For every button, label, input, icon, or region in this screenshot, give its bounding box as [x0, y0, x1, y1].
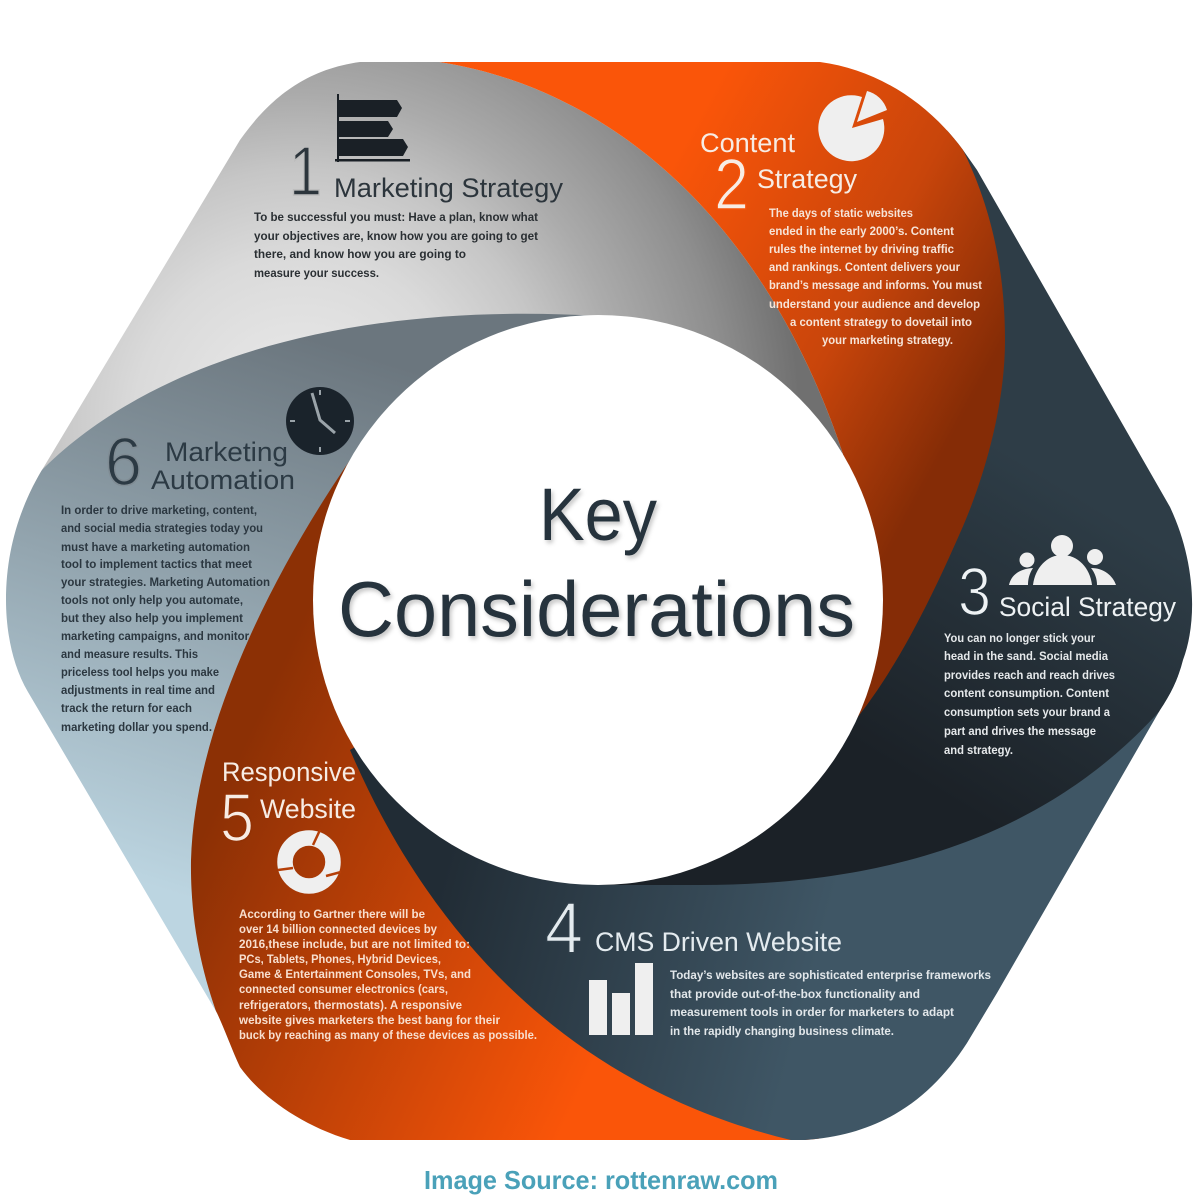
body text: priceless tool helps you make: [61, 667, 219, 679]
body text: your marketing strategy.: [822, 335, 953, 347]
body text: In order to drive marketing, content,: [61, 505, 257, 517]
body text: and strategy.: [944, 745, 1013, 757]
body text: [238, 909, 537, 1042]
segment 4 background: slate: [350, 676, 1178, 1140]
heading: Content: [700, 128, 795, 158]
body text: understand your audience and develop: [769, 299, 980, 311]
icon: clock: [286, 387, 354, 455]
center title: [338, 473, 855, 653]
body text: and social media strategies today you: [61, 523, 263, 535]
body text: adjustments in real time and: [61, 685, 215, 697]
center title: Considerations: [338, 565, 855, 653]
body text: website gives marketers the best bang for their: [238, 1015, 501, 1027]
body text: part and drives the message: [944, 726, 1096, 738]
body text: [769, 208, 982, 347]
center title: Key: [539, 473, 657, 556]
body text: a content strategy to dovetail into: [790, 317, 972, 329]
body text: Today’s websites are sophisticated enterprise frameworks: [670, 970, 991, 982]
body text: must have a marketing automation: [61, 542, 250, 554]
body text: provides reach and reach drives: [944, 670, 1115, 682]
body text: The days of static websites: [769, 208, 913, 220]
heading: Strategy: [757, 164, 857, 194]
segment 2 background: orange: [425, 40, 1005, 723]
body text: marketing dollar you spend.: [61, 722, 212, 734]
segment 3 background: dark navy: [598, 120, 1200, 885]
heading: [220, 757, 356, 856]
body text: that provide out-of-the-box functionality and: [670, 989, 920, 1001]
body text: connected consumer electronics (cars,: [239, 984, 448, 996]
center circle: [313, 315, 883, 885]
body text: 2016,these include, but are not limited to:: [239, 939, 470, 951]
heading: [958, 554, 1176, 630]
image source caption: Image Source: rottenraw.com: [424, 1165, 778, 1195]
body text: but they also help you implement: [61, 613, 243, 625]
segment 1 background: gray: [28, 62, 843, 496]
body text: and rankings. Content delivers your: [769, 262, 961, 274]
heading: [700, 128, 857, 225]
heading: [105, 424, 295, 500]
body text: there, and know how you are going to: [254, 249, 466, 261]
panel 1: marketing strategy: [254, 94, 563, 280]
heading: 6: [105, 424, 142, 500]
body text: tool to implement tactics that meet: [61, 559, 252, 571]
segment 6 background: blue gray: [0, 314, 600, 1170]
body text: ended in the early 2000’s. Content: [769, 226, 954, 238]
heading: CMS Driven Website: [595, 927, 842, 957]
body text: You can no longer stick your: [944, 633, 1096, 645]
icon: bar arrows: [335, 94, 410, 162]
icon: people: [1009, 535, 1116, 585]
body text: According to Gartner there will be: [239, 909, 425, 921]
heading: Website: [260, 794, 356, 824]
body text: brand’s message and informs. You must: [769, 280, 982, 292]
body text: PCs, Tablets, Phones, Hybrid Devices,: [239, 954, 441, 966]
body text: your strategies. Marketing Automation: [61, 577, 270, 589]
heading: 2: [714, 145, 749, 225]
body text: [944, 633, 1115, 757]
panel 3: social strategy: [944, 535, 1176, 757]
panel 4: CMS driven website: [545, 889, 991, 1038]
heading: 4: [545, 889, 583, 969]
body text: measure your success.: [254, 268, 379, 280]
body text: Game & Entertainment Consoles, TVs, and: [239, 969, 471, 981]
heading: Marketing Strategy: [334, 173, 563, 203]
panel 2: content strategy: [700, 91, 982, 347]
body text: over 14 billion connected devices by: [239, 924, 438, 936]
body text: measurement tools in order for marketers to adapt: [670, 1007, 954, 1019]
panel 5: responsive website: [220, 757, 537, 1042]
heading: 5: [220, 780, 254, 856]
body text: To be successful you must: Have a plan, know what: [254, 212, 538, 224]
body text: in the rapidly changing business climate.: [670, 1026, 894, 1038]
heading: Marketing: [165, 437, 288, 467]
body text: [61, 505, 270, 734]
body text: rules the internet by driving traffic: [769, 244, 955, 256]
body text: head in the sand. Social media: [944, 651, 1109, 663]
body text: and measure results. This: [61, 649, 198, 661]
body text: consumption sets your brand a: [944, 707, 1111, 719]
heading: 3: [958, 554, 991, 630]
body text: marketing campaigns, and monitor: [61, 631, 250, 643]
heading: 1: [289, 132, 322, 210]
heading: Social Strategy: [999, 592, 1176, 622]
body text: track the return for each: [61, 703, 192, 715]
segment 5 background: orange: [191, 450, 830, 1170]
heading: [545, 889, 842, 969]
heading: Automation: [151, 465, 295, 495]
body text: refrigerators, thermostats). A responsive: [239, 1000, 462, 1012]
body text: tools not only help you automate,: [61, 595, 243, 607]
body text: content consumption. Content: [944, 688, 1109, 700]
icon: bar chart: [589, 963, 653, 1035]
heading: Responsive: [222, 757, 356, 787]
body text: [254, 212, 538, 280]
heading: [289, 132, 563, 210]
body text: your objectives are, know how you are going to get: [254, 231, 538, 243]
body text: [670, 970, 991, 1038]
icon: pie chart: [818, 91, 887, 161]
panel 6: marketing automation: [61, 387, 354, 734]
body text: buck by reaching as many of these devices as possible.: [239, 1030, 537, 1042]
icon: circular arrows: [278, 830, 341, 886]
